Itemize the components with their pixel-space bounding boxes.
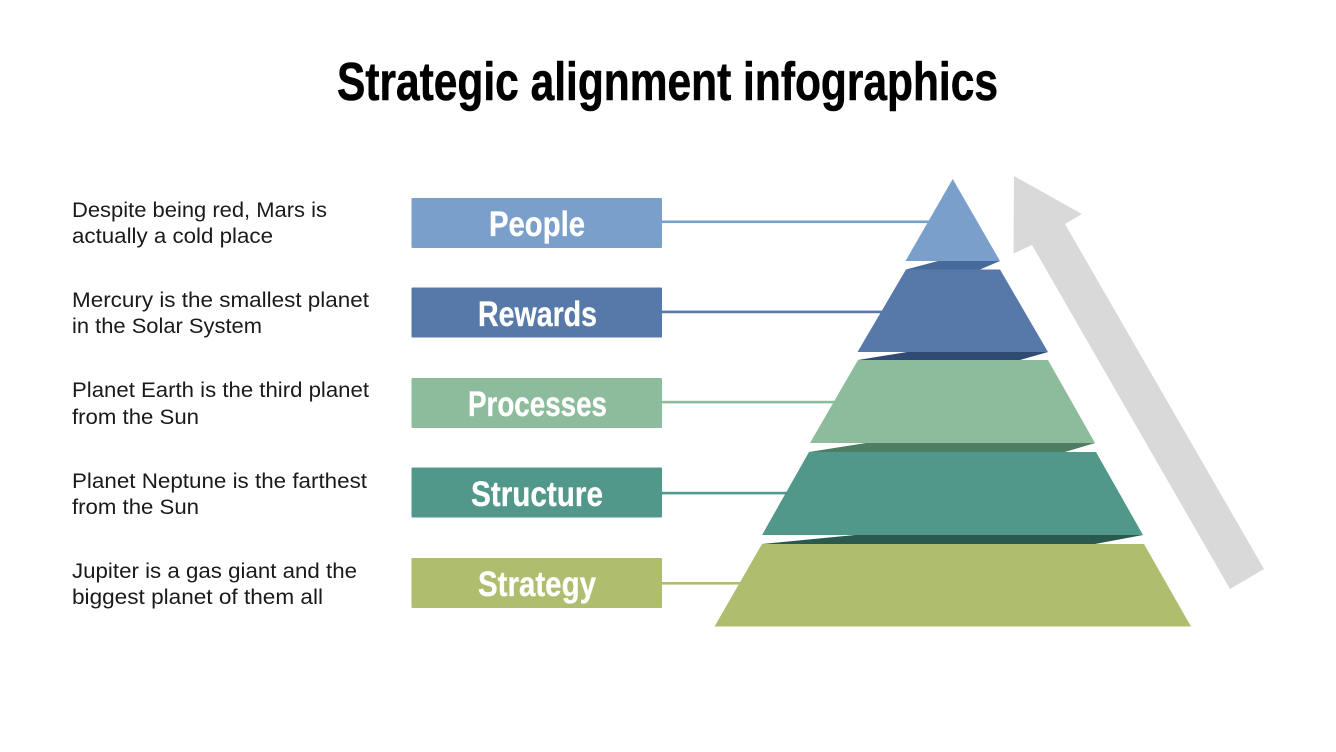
label: strategy: Strategy (478, 565, 596, 604)
label: people: People (489, 205, 585, 244)
label: processes: Processes (468, 385, 607, 424)
connector: strategy (660, 582, 745, 585)
text block: people description: Despite being red, Mars is (72, 199, 327, 222)
text block: strategy description (72, 560, 357, 609)
text block: rewards description (72, 289, 369, 338)
text block: structure description: from the Sun (72, 496, 199, 519)
text block: structure description: Planet Neptune is the farthest (72, 470, 367, 493)
label: strategy (412, 558, 662, 608)
label: processes (412, 378, 662, 428)
connector: structure (660, 492, 790, 494)
text block: people description: actually a cold place (72, 225, 273, 248)
label: structure: Structure (471, 475, 603, 514)
text block: structure description (72, 470, 367, 519)
label: rewards (412, 288, 662, 338)
text block: strategy description: biggest planet of them all (72, 586, 323, 609)
text block: rewards description: in the Solar System (72, 315, 262, 338)
tier: structure (762, 452, 1143, 544)
text block: processes description: from the Sun (72, 406, 199, 429)
tier: strategy (714, 544, 1191, 626)
arrow: upward progression (1014, 176, 1264, 589)
pyramid (714, 179, 1191, 626)
label: people (412, 198, 662, 248)
tier: people (906, 179, 1000, 270)
text block: processes description (72, 379, 369, 429)
tier: processes (809, 360, 1095, 452)
text block: rewards description: Mercury is the smallest planet (72, 289, 369, 312)
label: structure (412, 468, 662, 518)
title: Strategic alignment infographics (337, 52, 998, 112)
connector: rewards (660, 311, 885, 313)
text block: people description (72, 199, 327, 248)
connector: processes (660, 401, 840, 403)
text block: strategy description: Jupiter is a gas giant and the (72, 560, 357, 583)
connector: people (660, 220, 935, 223)
label: rewards: Rewards (478, 295, 597, 334)
text block: processes description: Planet Earth is the third planet (72, 379, 369, 402)
tier: rewards (858, 270, 1048, 360)
